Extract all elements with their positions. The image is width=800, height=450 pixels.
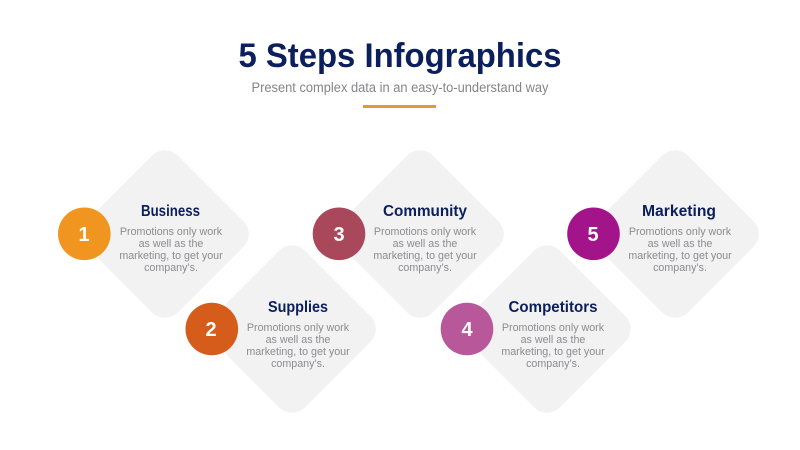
diamond 1 xyxy=(74,143,256,325)
body text 3: company’s. xyxy=(398,262,452,274)
heading 2: Supplies xyxy=(268,299,328,316)
body text 2: Promotions only work xyxy=(247,322,350,334)
circle 5 xyxy=(567,208,620,260)
body text 2: company’s. xyxy=(271,358,325,370)
body text 4: Promotions only work xyxy=(502,322,605,334)
heading 1: Business xyxy=(141,203,200,220)
circle 3 xyxy=(313,208,365,260)
circle 2 xyxy=(186,303,238,355)
body text 1: marketing, to get your xyxy=(119,250,223,262)
diamond 5 xyxy=(584,143,766,325)
diamond 2 xyxy=(201,238,383,420)
number 5: 5 xyxy=(587,224,599,246)
circle 1 xyxy=(58,208,111,260)
body text 4: company’s. xyxy=(526,358,580,370)
number 3: 3 xyxy=(333,224,345,246)
number 1: 1 xyxy=(78,224,90,246)
panel: step 3 community xyxy=(313,143,511,325)
heading 4: Competitors xyxy=(508,299,598,316)
panel: step 5 marketing xyxy=(567,143,766,325)
panel: step 2 supplies xyxy=(186,238,383,420)
panel: step 4 competitors xyxy=(441,238,638,420)
panel: step 1 business xyxy=(58,143,256,325)
diamond 3 xyxy=(329,143,511,325)
body text 5: Promotions only work xyxy=(629,226,732,238)
body text 5: as well as the xyxy=(648,238,712,250)
body text 3: as well as the xyxy=(393,238,457,250)
heading 5: Marketing xyxy=(642,203,716,220)
diamond 4 xyxy=(456,238,638,420)
body text 1: company’s. xyxy=(144,262,198,274)
title: 5 Steps Infographics xyxy=(238,37,562,75)
heading 3: Community xyxy=(383,203,467,220)
body text 1: as well as the xyxy=(139,238,203,250)
body text 5: company’s. xyxy=(653,262,707,274)
body text 4: as well as the xyxy=(521,334,585,346)
subtitle: Present complex data in an easy-to-understand way xyxy=(252,80,549,95)
body text 3: marketing, to get your xyxy=(373,250,477,262)
number 2: 2 xyxy=(205,319,217,341)
body text 5: marketing, to get your xyxy=(628,250,732,262)
body text 2: as well as the xyxy=(266,334,330,346)
circle 4 xyxy=(441,303,493,355)
title underline xyxy=(363,105,436,108)
body text 3: Promotions only work xyxy=(374,226,477,238)
number 4: 4 xyxy=(461,319,473,341)
body text 1: Promotions only work xyxy=(120,226,223,238)
body text 2: marketing, to get your xyxy=(246,346,350,358)
body text 4: marketing, to get your xyxy=(501,346,605,358)
